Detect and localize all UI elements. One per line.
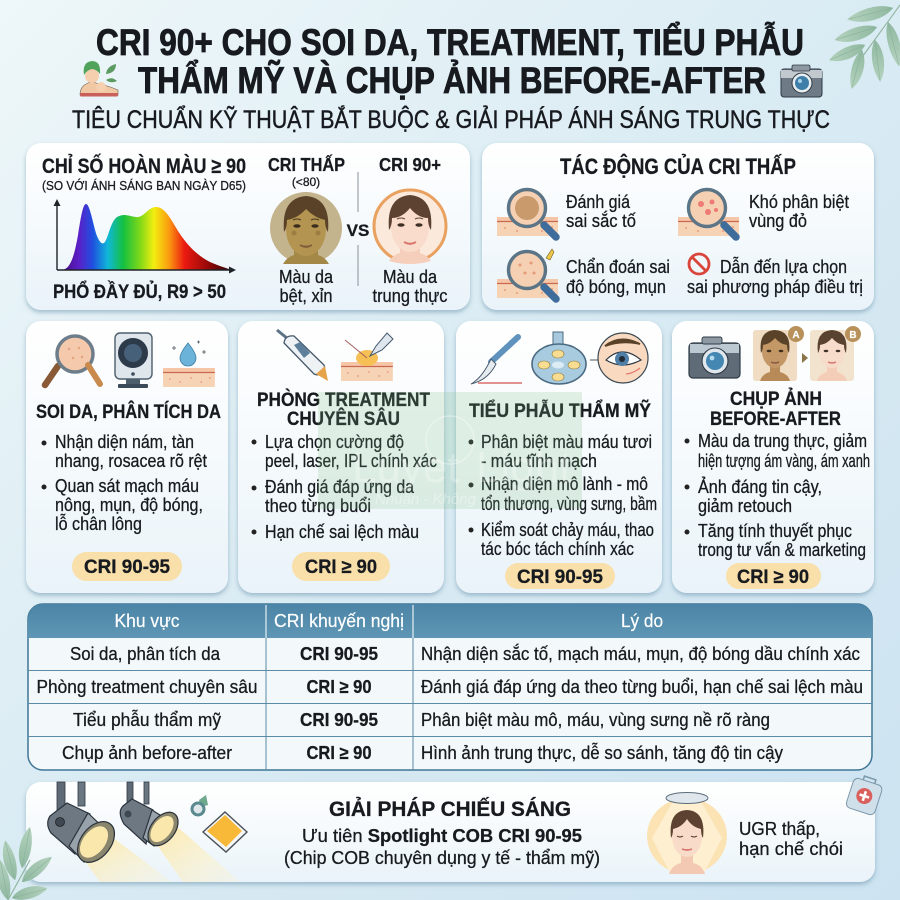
heading: skin analysis: SOI DA, PHÂN TÍCH DA: [36, 401, 221, 423]
label: CRI 90+: CRI 90+: [379, 155, 441, 175]
heading: lighting solution: GIẢI PHÁP CHIẾU SÁNG: [329, 798, 571, 821]
badge: CRI 90-95: CRI 90-95: [517, 567, 603, 588]
icon: analysis device: [115, 333, 152, 388]
icon: laser on skin: [341, 333, 393, 381]
bullets: treatment room: [252, 432, 437, 542]
bullets: minor surgery: Kiểm soát chảy máu, thao: [481, 520, 654, 540]
table row: treatment: [36, 677, 863, 697]
divider: [357, 172, 359, 286]
decoration: leaves top right: [827, 2, 900, 91]
table row: surgery: Tiểu phẫu thẩm mỹ: [73, 709, 221, 730]
table row: photography: [62, 742, 783, 763]
bullets: skin analysis: Quan sát mạch máu: [55, 476, 199, 496]
bullets: skin analysis: lỗ chân lông: [55, 513, 142, 534]
badge: CRI >= 90: CRI ≥ 90: [737, 567, 809, 588]
label: low CRI: CRI THẤP: [268, 154, 345, 175]
panel: impact of low CRI: [482, 143, 874, 310]
bullets: before-after: Màu da trung thực, giảm: [698, 431, 867, 451]
face under low-glare light: [647, 792, 727, 874]
bullets: minor surgery: - máu tĩnh mạch: [481, 451, 597, 471]
bullets: skin analysis: Nhận diện nám, tàn: [55, 432, 194, 452]
watermark: [318, 392, 582, 509]
table row: surgery: Phân biệt màu mô, máu, vùng sưng nề rõ ràng: [421, 710, 770, 730]
text: medical chip: (Chip COB chuyên dụng y tế - thẩm mỹ): [284, 848, 600, 868]
table row: skin analysis: Nhận diện sắc tố, mạch máu, mụn, độ bóng dầu chính xác: [421, 643, 860, 664]
bullets: minor surgery: tác bóc tách chính xác: [481, 539, 634, 559]
text: wrong diagnosis: độ bóng, mụn: [566, 277, 666, 297]
table row: photography: Chụp ảnh before-after: [62, 743, 232, 763]
text: priority: Ưu tiên Spotlight COB CRI 90-95: [302, 826, 582, 846]
text: wrong pigment: [566, 192, 636, 231]
icon: shine magnifier: [497, 249, 558, 299]
table row: surgery: [73, 709, 770, 730]
icon: pigment magnifier: [497, 190, 558, 237]
title: [96, 21, 804, 101]
decoration: leaves bottom left: [0, 826, 55, 900]
table row: skin analysis: [70, 643, 860, 664]
subheading: D65: (SO VỚI ÁNH SÁNG BAN NGÀY D65): [42, 178, 246, 193]
bullets: before-after: giảm retouch: [698, 496, 792, 516]
icon: small ring: [192, 795, 208, 815]
text: wrong treatment: Dẫn đến lựa chọn: [720, 256, 847, 277]
icon: spotlight left: [48, 782, 122, 869]
table row: surgery: CRI 90-95: [300, 710, 378, 730]
heading: minor surgery: TIỂU PHẪU THẨM MỸ: [469, 400, 651, 422]
badge: CRI >= 90: [726, 563, 821, 589]
label: low CRI skin: Màu da: [279, 267, 334, 287]
table header: Lý do: [621, 611, 663, 631]
icon: redness magnifier: [678, 190, 739, 237]
icon: camera in title: [781, 65, 822, 97]
face: low CRI: [270, 192, 342, 264]
badge: CRI 90-95: [72, 552, 182, 581]
bullets: skin analysis: nhang, rosacea rõ rệt: [55, 451, 207, 471]
table row: photography: Hình ảnh trung thực, dễ so sánh, tăng độ tin cậy: [421, 742, 783, 763]
bullets: skin analysis: nông, mụn, độ bóng,: [55, 495, 203, 515]
arrow: before to after: [802, 353, 808, 363]
panel: aesthetic minor surgery: [456, 321, 662, 593]
heading: before-after: [710, 388, 841, 430]
photo: after: [810, 326, 861, 381]
text: redness: vùng đỏ: [749, 211, 807, 231]
label: true skin: trung thực: [372, 286, 448, 306]
label: low CRI skin: [279, 267, 334, 306]
bullets: before-after: [684, 431, 870, 560]
text: wrong pigment: sai sắc tố: [566, 210, 636, 231]
label: low CRI skin: bệt, xỉn: [280, 286, 332, 306]
watermark: Nhuận - Không: [375, 491, 477, 508]
light beams: [84, 823, 240, 882]
bullets: minor surgery: Nhận diện mô lành - mô: [481, 474, 648, 494]
panel: treatment room: [238, 321, 444, 593]
bullets: treatment room: peel, laser, IPL chính xác: [265, 451, 437, 471]
icon: first aid kit: [845, 773, 884, 816]
heading: before-after: CHỤP ẢNH: [730, 388, 822, 410]
bullets: minor surgery: tổn thương, vùng sưng, bầm: [481, 494, 657, 514]
label: true skin: Màu da: [383, 267, 438, 287]
bullets: before-after: Tăng tính thuyết phục: [698, 521, 852, 541]
text: redness: [749, 192, 849, 231]
title: THẨM MỸ VÀ CHỤP ẢNH BEFORE-AFTER: [138, 59, 766, 101]
icon: scalpel: [471, 337, 522, 384]
heading: before-after: BEFORE-AFTER: [710, 409, 841, 430]
text: wrong diagnosis: Chẩn đoán sai: [566, 257, 670, 277]
heading: treatment room: PHÒNG TREATMENT: [257, 389, 430, 411]
badge: CRI >= 90: CRI ≥ 90: [305, 557, 377, 578]
watermark: Light: [476, 443, 571, 492]
icon: handpiece: [277, 330, 328, 381]
title: CRI 90+ CHO SOI DA, TREATMENT, TIỂU PHẪU: [96, 21, 804, 63]
text: low UGR: UGR thấp,: [739, 819, 820, 839]
icon: eye: [590, 333, 648, 383]
bullets: skin analysis: [42, 432, 207, 534]
table row: photography: CRI ≥ 90: [306, 743, 372, 763]
table header: Khu vực: [114, 611, 180, 631]
text: wrong treatment: [687, 256, 863, 297]
table row: treatment: CRI ≥ 90: [306, 677, 372, 697]
panel: lighting solution: [26, 773, 884, 882]
badge: CRI >= 90: [292, 552, 390, 581]
badge: CRI 90-95: [505, 563, 615, 589]
chart: full spectrum: [54, 199, 236, 274]
table row: skin analysis: Soi da, phân tích da: [70, 644, 221, 664]
icon: magnifier and tweezers: [45, 336, 100, 385]
photo: after: B: [849, 330, 857, 341]
badge: VS: VS: [347, 221, 369, 240]
watermark: Luyet: [352, 443, 460, 492]
bullets: minor surgery: Phân biệt màu máu tươi: [481, 432, 652, 452]
icon: spa woman: [80, 61, 118, 96]
panel: before-after photography: [672, 321, 874, 593]
face: CRI 90+: [374, 190, 446, 264]
text: low UGR: [739, 819, 843, 859]
text: wrong diagnosis: [566, 257, 670, 297]
table header: [114, 611, 663, 631]
photo: before: [753, 326, 804, 381]
bullets: before-after: Ảnh đáng tin cậy,: [698, 476, 822, 497]
bullets: treatment room: theo từng buổi: [265, 496, 371, 516]
bullets: before-after: trong tư vấn & marketing: [698, 540, 866, 560]
text: redness: Khó phân biệt: [749, 192, 849, 212]
label: true skin: [372, 267, 448, 306]
text: wrong treatment: sai phương pháp điều trị: [687, 277, 863, 297]
badge: CRI 90-95: CRI 90-95: [84, 557, 170, 578]
heading: treatment room: CHUYÊN SÂU: [287, 408, 400, 430]
table: recommended CRI: [28, 604, 872, 770]
icon: camera: [689, 337, 740, 378]
icon: surgical lamp: [532, 332, 586, 384]
icon: water drop on skin: [163, 340, 215, 387]
heading: CRI >= 90: CHỈ SỐ HOÀN MÀU ≥ 90: [42, 154, 246, 178]
table row: treatment: Đánh giá đáp ứng da theo từng buổi, hạn chế sai lệch màu: [421, 677, 863, 697]
photo: before: A: [792, 330, 800, 341]
panel: color rendering index: [26, 143, 470, 310]
text: wrong pigment: Đánh giá: [566, 192, 631, 212]
bullets: treatment room: Lựa chọn cường độ: [265, 432, 404, 452]
label: under 80: (<80): [292, 175, 320, 189]
bullets: minor surgery: [468, 432, 657, 559]
text: low UGR: hạn chế chói: [739, 839, 843, 859]
icon: spotlight right: [120, 782, 184, 851]
table row: skin analysis: CRI 90-95: [300, 644, 378, 664]
icon: COB chip: [203, 812, 247, 852]
panel: skin analysis: [26, 321, 228, 593]
caption: full spectrum: PHỔ ĐẦY ĐỦ, R9 > 50: [53, 281, 226, 303]
heading: treatment room: [257, 389, 430, 430]
heading: impact: TÁC ĐỘNG CỦA CRI THẤP: [560, 154, 796, 179]
bullets: treatment room: Hạn chế sai lệch màu: [265, 522, 419, 542]
table row: treatment: Phòng treatment chuyên sâu: [36, 677, 258, 697]
icon: prohibited: [689, 254, 709, 274]
table header: CRI khuyến nghị: [274, 611, 404, 631]
bullets: treatment room: Đánh giá đáp ứng da: [265, 477, 415, 497]
